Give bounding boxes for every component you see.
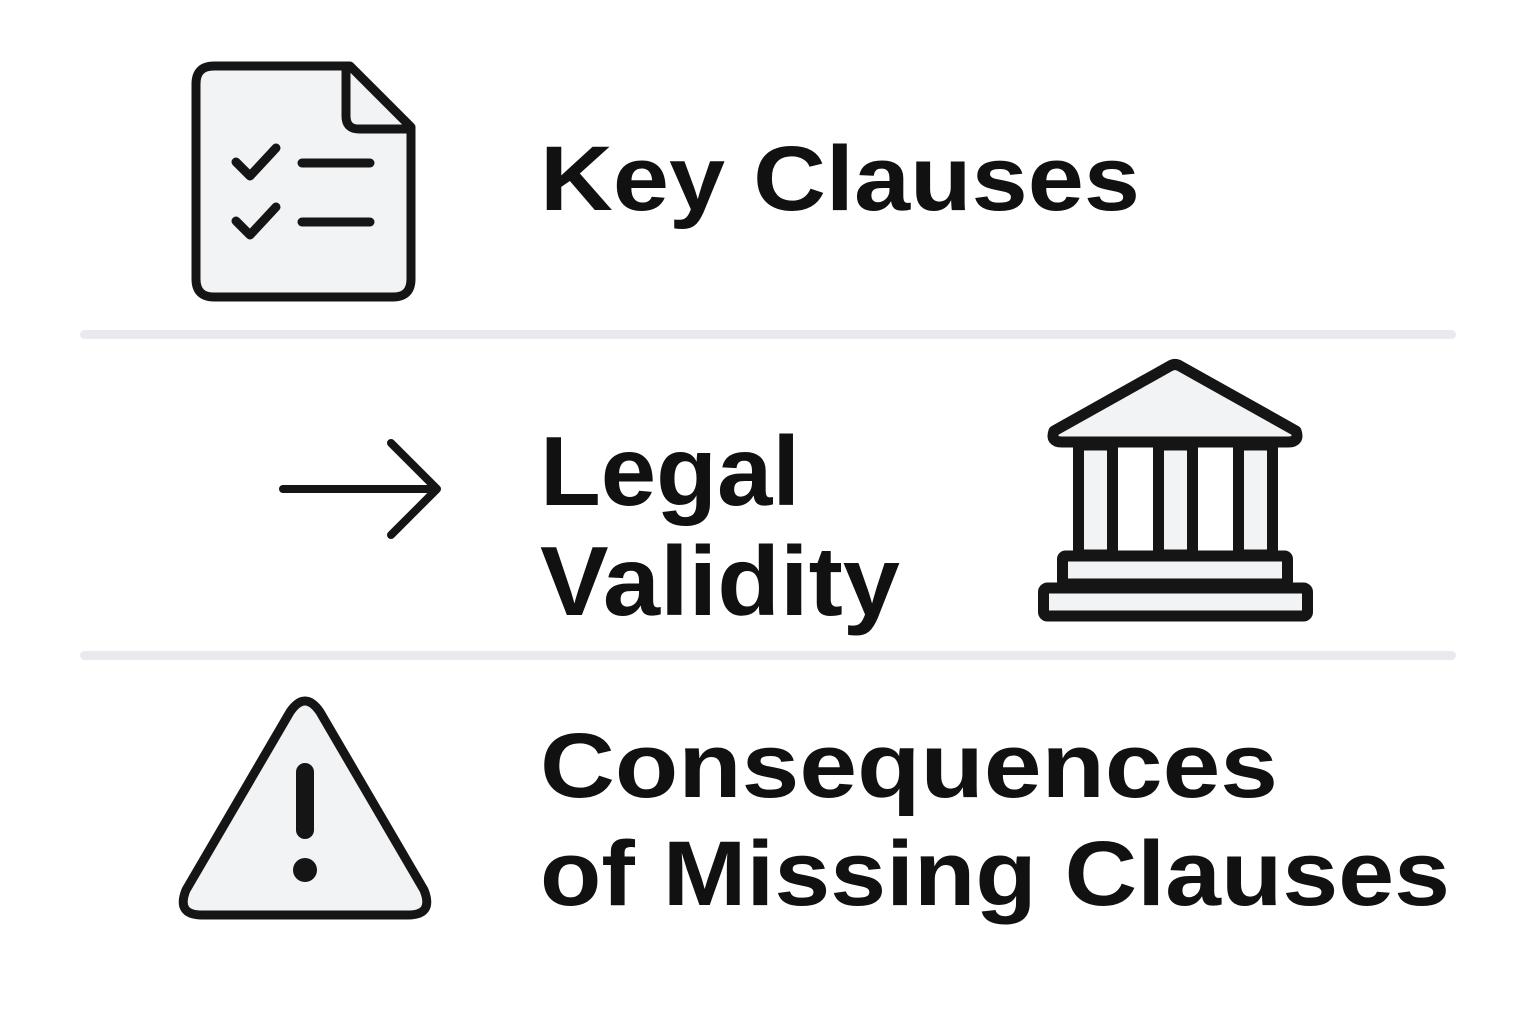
heading: Legal Validity: Legal — [540, 416, 800, 526]
heading: Consequences of Missing Clauses: Consequences — [540, 715, 1278, 817]
heading: Key Clauses: Key Clauses — [540, 128, 1140, 230]
icon: courthouse — [1044, 364, 1308, 616]
heading: Consequences of Missing Clauses: of Missing Clauses — [540, 823, 1450, 925]
icon: warning triangle — [183, 701, 427, 915]
arrow — [283, 443, 437, 535]
heading: Legal Validity: Validity — [540, 526, 900, 636]
icon: document checklist — [196, 66, 411, 297]
heading: Legal Validity — [540, 416, 900, 636]
heading: Consequences of Missing Clauses — [540, 715, 1450, 925]
